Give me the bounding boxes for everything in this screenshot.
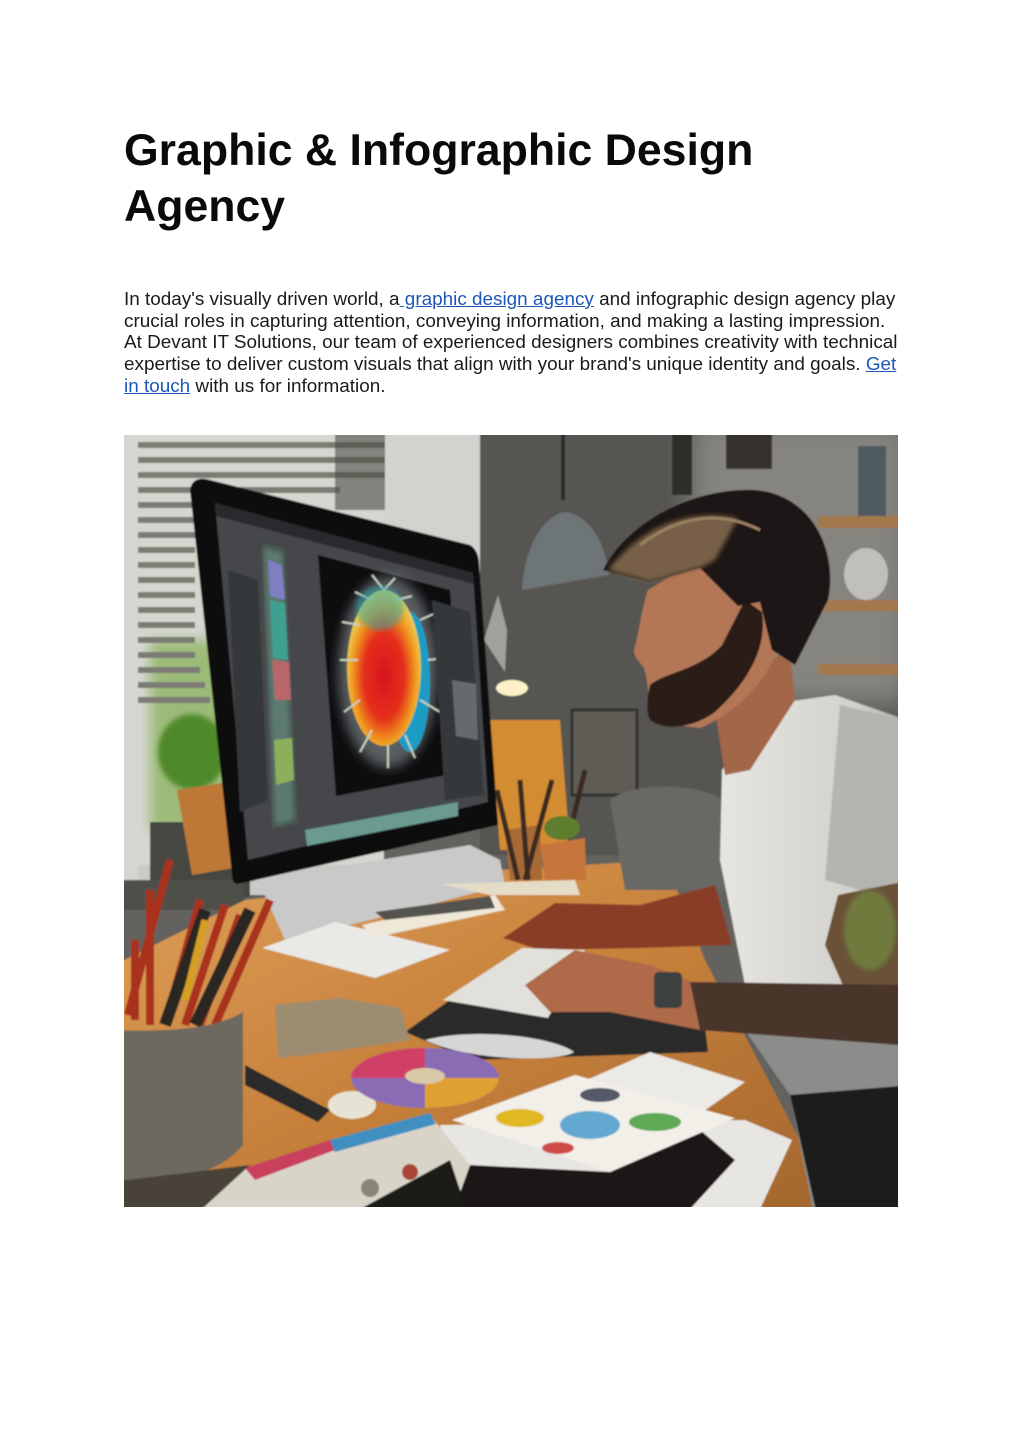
intro text block: crucial roles in capturing attention, conveying information, and making a lasting impression. (124, 311, 885, 332)
window with greenery and blinds (110, 420, 385, 910)
man: front forearm, hand and watch (525, 950, 912, 1046)
man: tattooed upper arm (824, 882, 898, 986)
desk mat (406, 1000, 709, 1060)
sketchbook with paint swatches (452, 1075, 735, 1172)
white paper sheet with black paint (439, 1118, 793, 1207)
keyboard (443, 948, 585, 1018)
man: rear forearm holding pen (503, 885, 732, 950)
man: head and face (633, 568, 777, 729)
photo: designer working at a monitor (124, 435, 898, 1207)
mouse (425, 1034, 574, 1058)
artwork: colourful burst (338, 575, 445, 768)
man: neck (712, 650, 795, 775)
intro text block: expertise to deliver custom visuals that align with your brand's unique identity and goals. Get (124, 354, 896, 375)
title: Agency (124, 182, 285, 230)
man: beard (647, 600, 763, 727)
intro text block (124, 289, 898, 397)
intro text block: in touch with us for information. (124, 376, 385, 397)
colour thumbnails strip (305, 802, 458, 846)
desk (110, 860, 842, 1220)
colour chart card (589, 1050, 746, 1111)
pendant lamp (484, 420, 609, 696)
man: hair (603, 490, 830, 665)
warm wall glow and picture frame (490, 710, 730, 890)
artwork canvas (318, 555, 463, 796)
man: torso and t-shirt (720, 695, 912, 1220)
wall shelves (672, 435, 898, 676)
monitor stand (258, 845, 505, 978)
title: Graphic & Infographic Design (124, 126, 753, 174)
dark pens on desk (124, 1164, 250, 1207)
pen holder on desk (497, 770, 586, 880)
wall background (124, 435, 898, 1138)
screen interface (215, 503, 488, 860)
monitor (190, 479, 498, 884)
intro text block: In today's visually driven world, a graphic design agency and infographic design agency play (124, 289, 895, 310)
colour wheel (351, 1048, 499, 1108)
intro text block: At Devant IT Solutions, our team of experienced designers combines creativity with technical (124, 332, 898, 353)
paint palette sheet foreground (202, 1112, 470, 1207)
small sample blocks (245, 998, 410, 1122)
title (124, 126, 753, 230)
desk papers behind keyboard (362, 880, 580, 938)
pencil cup with pencils (110, 860, 270, 1181)
potted plant (158, 714, 234, 875)
